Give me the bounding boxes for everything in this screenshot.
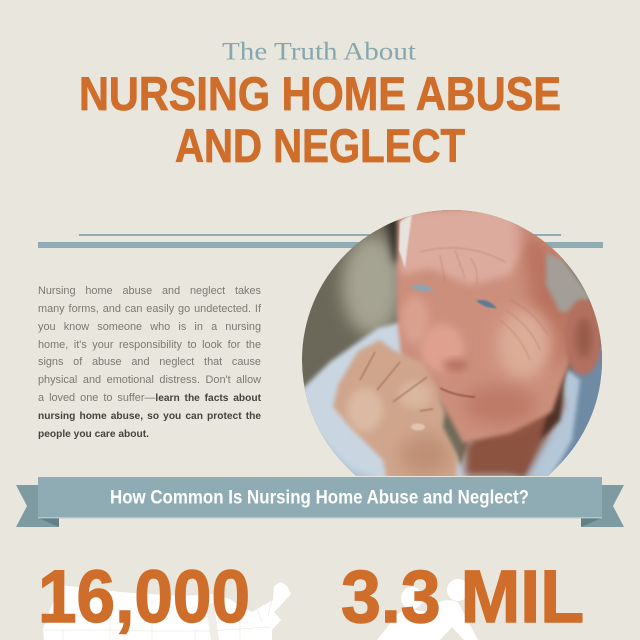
people silhouette: caregiver helping an elderly person — [377, 579, 478, 640]
ribbon heading: How Common Is Nursing Home Abuse and Neglect? — [110, 486, 529, 508]
intro paragraph: a loved one to suffer—learn the facts about — [38, 392, 261, 404]
intro paragraph: many forms, and can easily go undetected. If — [38, 303, 261, 315]
intro paragraph: you know someone who is in a nursing — [38, 321, 261, 333]
intro paragraph: home, it's your responsibility to look for the — [38, 339, 261, 351]
intro paragraph: signs of abuse and neglect that cause — [38, 356, 261, 368]
title line: and Neglect: AND NEGLECT — [175, 119, 465, 172]
title line: Nursing Home Abuse: NURSING HOME ABUSE — [79, 67, 561, 120]
intro paragraph: physical and emotional distress. Don't allow — [38, 374, 261, 386]
ribbon tail: left — [16, 485, 59, 527]
stat: 3.3 MIL: 3.3 MIL — [341, 555, 584, 638]
stat: 16,000: 16,000 — [38, 555, 250, 638]
photo: elderly man resting chin on his hand — [296, 205, 606, 480]
intro paragraph: people you care about. — [38, 429, 149, 440]
right eye — [476, 300, 497, 308]
ribbon tail: right — [581, 485, 624, 527]
intro paragraph — [38, 285, 262, 440]
heading: The Truth About: The Truth About — [222, 36, 416, 66]
intro paragraph: Nursing home abuse and neglect takes — [38, 285, 261, 297]
map of the United States — [43, 582, 291, 640]
intro paragraph: nursing home abuse, so you can protect the — [38, 411, 261, 422]
left eye — [410, 285, 434, 291]
ribbon banner — [16, 477, 624, 527]
